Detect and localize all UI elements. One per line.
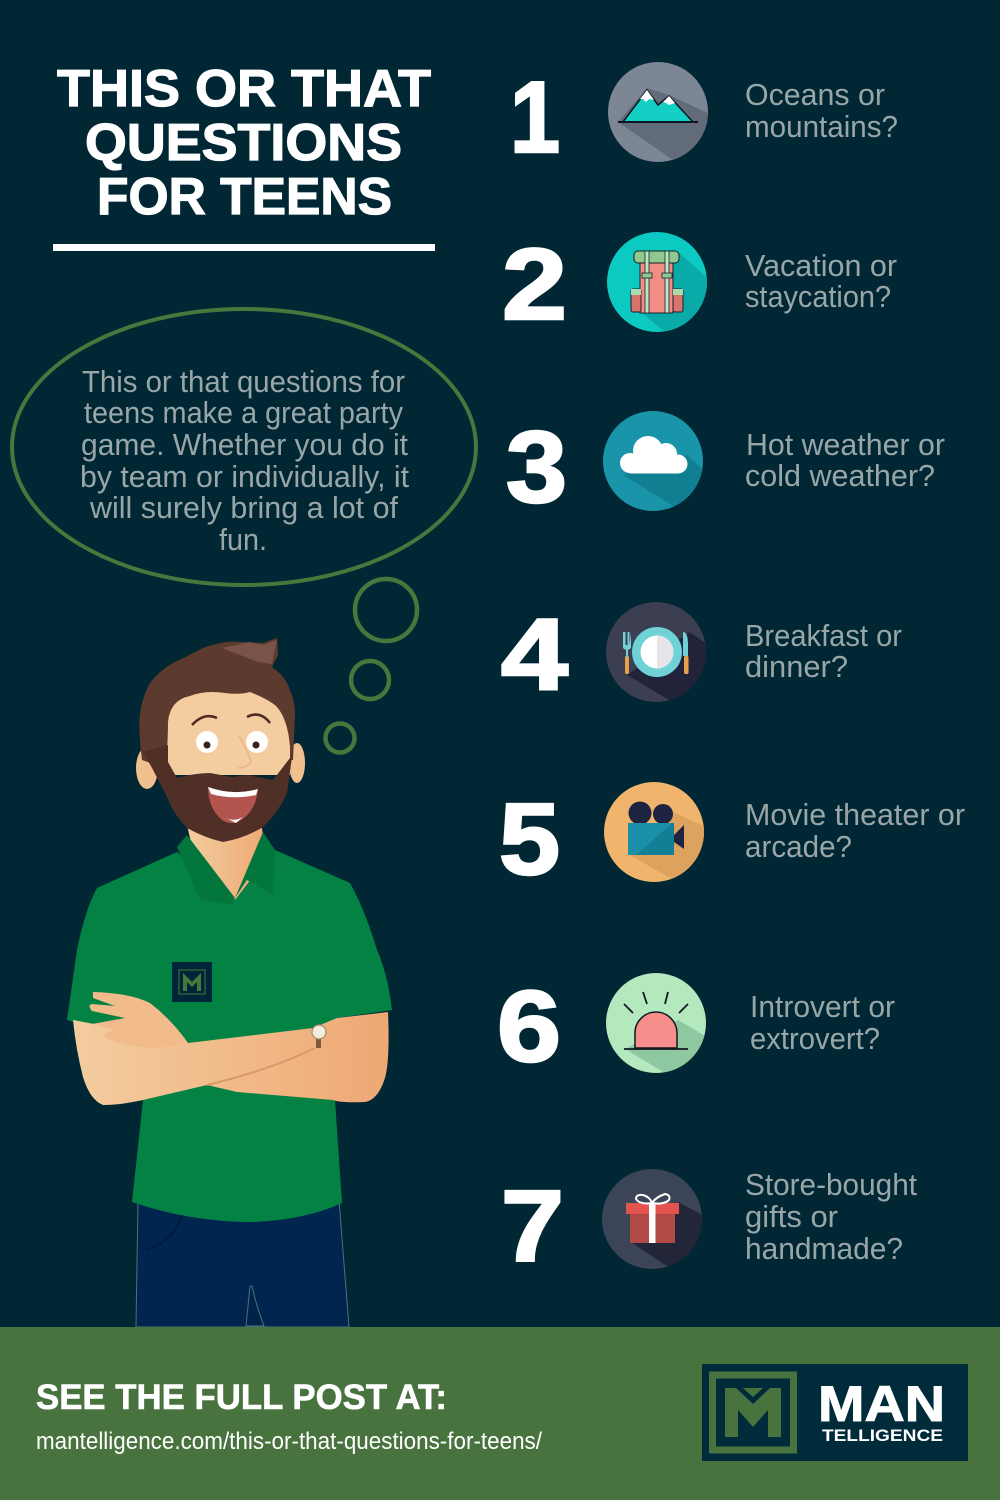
icon: backpack: [607, 232, 707, 332]
question 4: dinner?: [745, 649, 848, 684]
collar: [177, 832, 275, 905]
hair highlight: [222, 640, 277, 664]
title: QUESTIONS: [85, 114, 402, 172]
title: THIS OR THAT: [57, 60, 431, 118]
question 7: gifts or: [745, 1199, 838, 1234]
green polo shirt: [67, 850, 392, 1222]
title: [57, 60, 431, 226]
number 6: 6: [497, 971, 561, 1083]
shirt badge: [172, 962, 212, 1002]
question 5: [745, 797, 965, 864]
icon: cloud: [603, 411, 703, 511]
mouth: [208, 787, 258, 823]
footer band: [0, 1327, 1000, 1500]
question 4: Breakfast or: [745, 618, 902, 653]
thought bubble: fun.: [219, 522, 267, 557]
trousers: [136, 1200, 349, 1327]
title: FOR TEENS: [97, 168, 392, 226]
ears: [136, 743, 305, 789]
icon: siren: [606, 973, 706, 1073]
question 6: [750, 989, 895, 1056]
question 6: Introvert or: [750, 989, 895, 1024]
neck: [187, 825, 266, 900]
question 1: Oceans or: [745, 77, 885, 112]
question 1: [745, 77, 898, 144]
thought bubble: [12, 309, 476, 585]
icon: gift box: [602, 1169, 702, 1269]
Mantelligence logo: MAN: [818, 1376, 945, 1432]
icon: movie camera: [604, 782, 704, 882]
hair: [139, 638, 295, 770]
question 7: handmade?: [745, 1231, 903, 1266]
question 2: [745, 248, 897, 314]
number 3: 3: [506, 412, 567, 524]
beard: [143, 745, 293, 842]
icon: plate and cutlery: [606, 602, 706, 702]
question 7: [745, 1167, 917, 1266]
question 5: Movie theater or: [745, 797, 965, 832]
question 2: staycation?: [745, 279, 891, 314]
number 2: 2: [502, 229, 567, 341]
question 2: Vacation or: [745, 248, 897, 283]
question 3: Hot weather or: [746, 427, 945, 462]
question 1: mountains?: [745, 109, 898, 144]
number 4: 4: [501, 599, 568, 711]
title underline: [53, 244, 435, 251]
nose: [238, 736, 251, 768]
eyes: [196, 731, 268, 753]
thought bubble: teens make a great party: [84, 395, 403, 430]
number 5: 5: [499, 784, 560, 896]
icon: mountains: [608, 62, 708, 162]
face: [165, 692, 290, 775]
question 3: cold weather?: [745, 458, 935, 493]
hand: [90, 992, 188, 1047]
character: man with beard and green polo: [67, 638, 392, 1327]
eyebrows: [192, 715, 270, 725]
number 7: 7: [501, 1171, 564, 1283]
wristwatch: [312, 1025, 326, 1048]
Mantelligence logo: TELLIGENCE: [822, 1426, 943, 1445]
footer call to action: SEE THE FULL POST AT:: [36, 1378, 447, 1417]
question 3: [745, 427, 945, 493]
Mantelligence logo: [702, 1364, 968, 1461]
number 1: 1: [510, 62, 560, 174]
question 4: [745, 618, 902, 684]
question 6: extrovert?: [750, 1021, 880, 1056]
thought bubble: This or that questions for: [82, 364, 405, 399]
thought bubble: by team or individually, it: [80, 459, 409, 494]
question 7: Store-bought: [745, 1167, 917, 1202]
thought bubble: will surely bring a lot of: [89, 490, 398, 525]
thought bubble: game. Whether you do it: [81, 427, 408, 462]
footer call to action: mantelligence.com/this-or-that-questions-for-teens/: [36, 1428, 542, 1455]
question 5: arcade?: [745, 829, 852, 864]
footer call to action: [36, 1378, 542, 1455]
thought bubble trail circles: [326, 579, 417, 752]
crossed arms: [73, 1012, 389, 1105]
